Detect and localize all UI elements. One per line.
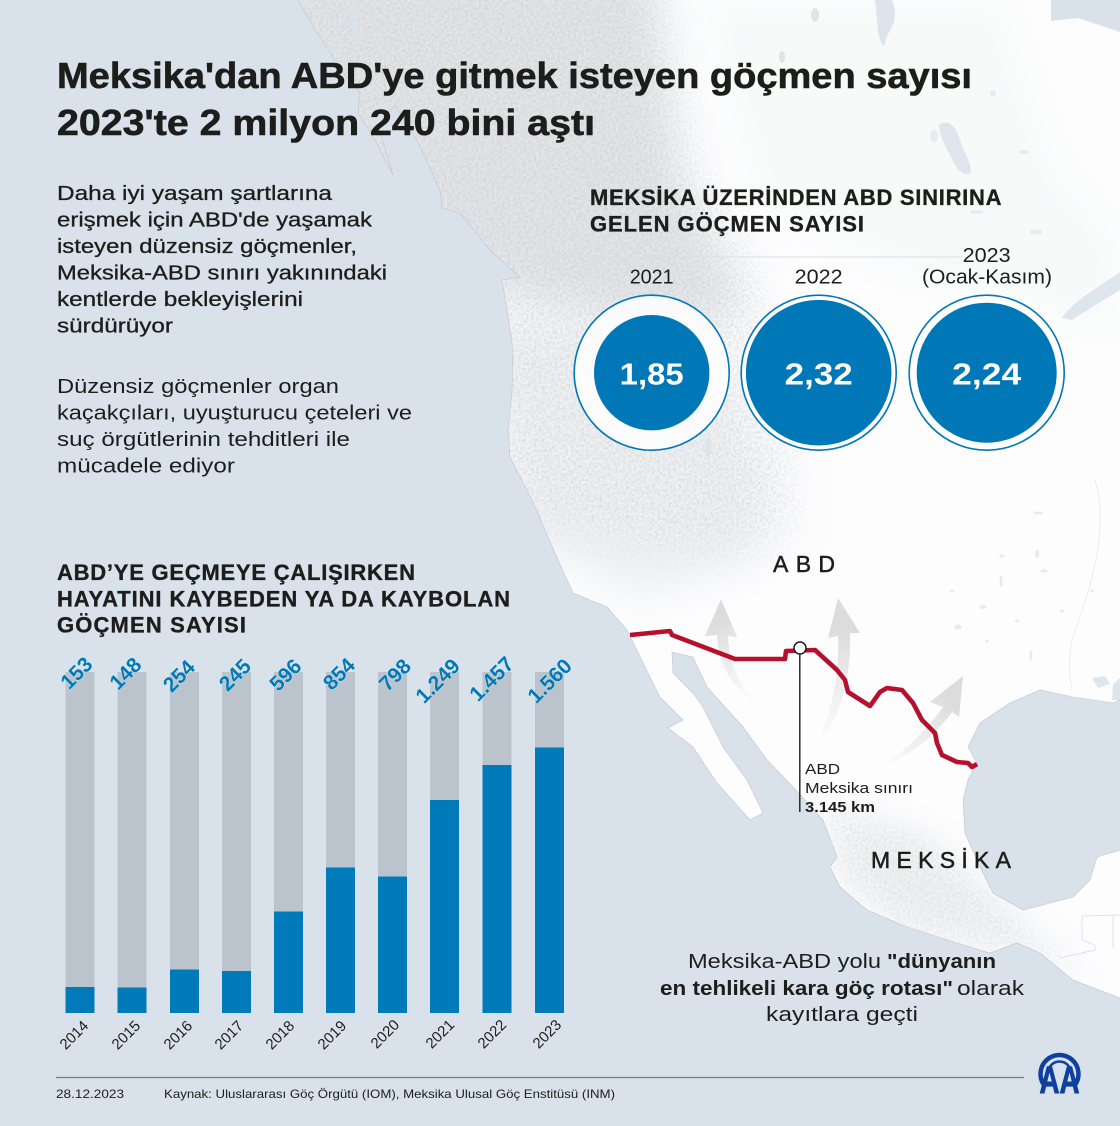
icon: Anadolu Agency logo xyxy=(1040,1055,1080,1102)
second paragraph xyxy=(57,376,412,478)
title: 2023'te 2 milyon 240 bini aştı xyxy=(57,102,595,143)
heading: deaths: HAYATINI KAYBEDEN YA DA KAYBOLAN xyxy=(57,586,510,612)
arrow 3 xyxy=(877,676,963,768)
border length callout: Meksika sınırı xyxy=(805,780,913,797)
panel: arrivals at US border xyxy=(532,185,1064,450)
route callout text: kayıtlara geçti xyxy=(766,1004,918,1026)
title: Meksika'dan ABD'ye gitmek isteyen göçmen sayısı xyxy=(57,55,972,96)
bar values: 254 xyxy=(159,656,200,697)
map: North America land xyxy=(299,0,1120,998)
intro paragraph: Meksika-ABD sınırı yakınındaki xyxy=(57,262,387,284)
arrow 1 xyxy=(705,599,760,707)
route callout text: "dünyanın xyxy=(887,951,996,973)
heading: arrivals: GELEN GÖÇMEN SAYISI xyxy=(590,212,864,236)
country label: Meksika: MEKSİKA xyxy=(871,847,1012,873)
intro paragraph: erişmek için ABD'de yaşamak xyxy=(57,210,373,232)
bar chart xyxy=(56,653,577,1053)
year axis labels: 2023 xyxy=(530,1017,565,1052)
bar values: 1.249 xyxy=(411,655,465,708)
bar values: 245 xyxy=(215,655,256,696)
country label: ABD: ABD xyxy=(773,551,835,577)
heading: arrivals: MEKSİKA ÜZERİNDEN ABD SINIRINA xyxy=(590,185,1002,210)
year axis labels: 2016 xyxy=(161,1018,196,1053)
icon: Anadolu Agency logo: AA xyxy=(1040,1060,1080,1102)
heading: deaths: GÖÇMEN SAYISI xyxy=(57,612,246,638)
circle 2023: 2023 xyxy=(963,245,1011,267)
map: Mexico-US border line xyxy=(630,631,977,767)
year axis labels: 2021 xyxy=(423,1017,458,1052)
circle 2021 xyxy=(574,266,729,450)
route callout text: olarak xyxy=(957,978,1025,1000)
circle 2021: 2021 xyxy=(630,266,674,288)
intro paragraph: Daha iyi yaşam şartlarına xyxy=(57,183,333,205)
bar values: 854 xyxy=(319,654,360,695)
second paragraph: kaçakçıları, uyuşturucu çeteleri ve xyxy=(57,402,412,424)
year axis labels: 2022 xyxy=(475,1017,510,1052)
title xyxy=(57,55,972,143)
year axis labels: 2018 xyxy=(263,1018,298,1053)
heading: arrivals xyxy=(590,185,1002,236)
year axis labels: 2014 xyxy=(57,1018,92,1053)
map: coastline edge xyxy=(298,0,1120,998)
route callout text: en tehlikeli kara göç rotası" xyxy=(660,978,953,1000)
footer rule xyxy=(56,1076,1024,1078)
footer date: 28.12.2023 xyxy=(56,1087,124,1101)
intro paragraph: kentlerde bekleyişlerini xyxy=(57,289,303,311)
bar values: 596 xyxy=(265,655,306,696)
bar values xyxy=(56,653,577,708)
border length callout: ABD xyxy=(805,761,840,778)
border length callout: 3.145 km xyxy=(805,799,875,816)
second paragraph: Düzensiz göçmenler organ xyxy=(57,376,339,398)
bar values: 798 xyxy=(375,655,416,696)
bar values: 153 xyxy=(56,653,97,694)
bar values: 1.560 xyxy=(523,655,577,708)
map: migration arrows xyxy=(705,598,963,768)
intro paragraph xyxy=(57,183,387,338)
route callout text xyxy=(660,951,1025,1026)
circle 2023: 2,24 xyxy=(952,356,1022,392)
second paragraph: suç örgütlerinin tehditleri ile xyxy=(57,429,350,451)
route callout text: Meksika-ABD yolu xyxy=(688,951,881,973)
circle 2021: 1,85 xyxy=(620,356,684,392)
circle 2022: 2,32 xyxy=(785,356,853,392)
circle 2022 xyxy=(741,266,896,450)
arrow 2 xyxy=(817,598,860,747)
panel: deaths and disappearances xyxy=(56,560,577,1053)
circle 2022: 2022 xyxy=(795,266,843,288)
heading: deaths: ABD’YE GEÇMEYE ÇALIŞIRKEN xyxy=(57,560,415,585)
year axis labels: 2017 xyxy=(212,1018,247,1053)
second paragraph: mücadele ediyor xyxy=(57,456,235,478)
border length callout xyxy=(794,642,913,816)
heading: deaths xyxy=(57,560,510,638)
bar values: 1.457 xyxy=(465,653,519,706)
year axis labels: 2019 xyxy=(315,1018,350,1053)
circle 2023: (Ocak-Kasım) xyxy=(922,266,1052,288)
circle 2023 xyxy=(909,245,1064,450)
intro paragraph: isteyen düzensiz göçmenler, xyxy=(57,236,357,258)
year axis labels: 2020 xyxy=(368,1017,403,1052)
intro paragraph: sürdürüyor xyxy=(57,316,173,338)
year axis labels: 2015 xyxy=(109,1018,144,1053)
small lakes xyxy=(905,80,1094,660)
footer source: Kaynak: Uluslararası Göç Örgütü (IOM), Meksika Ulusal Göç Enstitüsü (INM) xyxy=(164,1087,615,1101)
year axis labels xyxy=(57,1017,565,1053)
bar values: 148 xyxy=(105,653,147,694)
